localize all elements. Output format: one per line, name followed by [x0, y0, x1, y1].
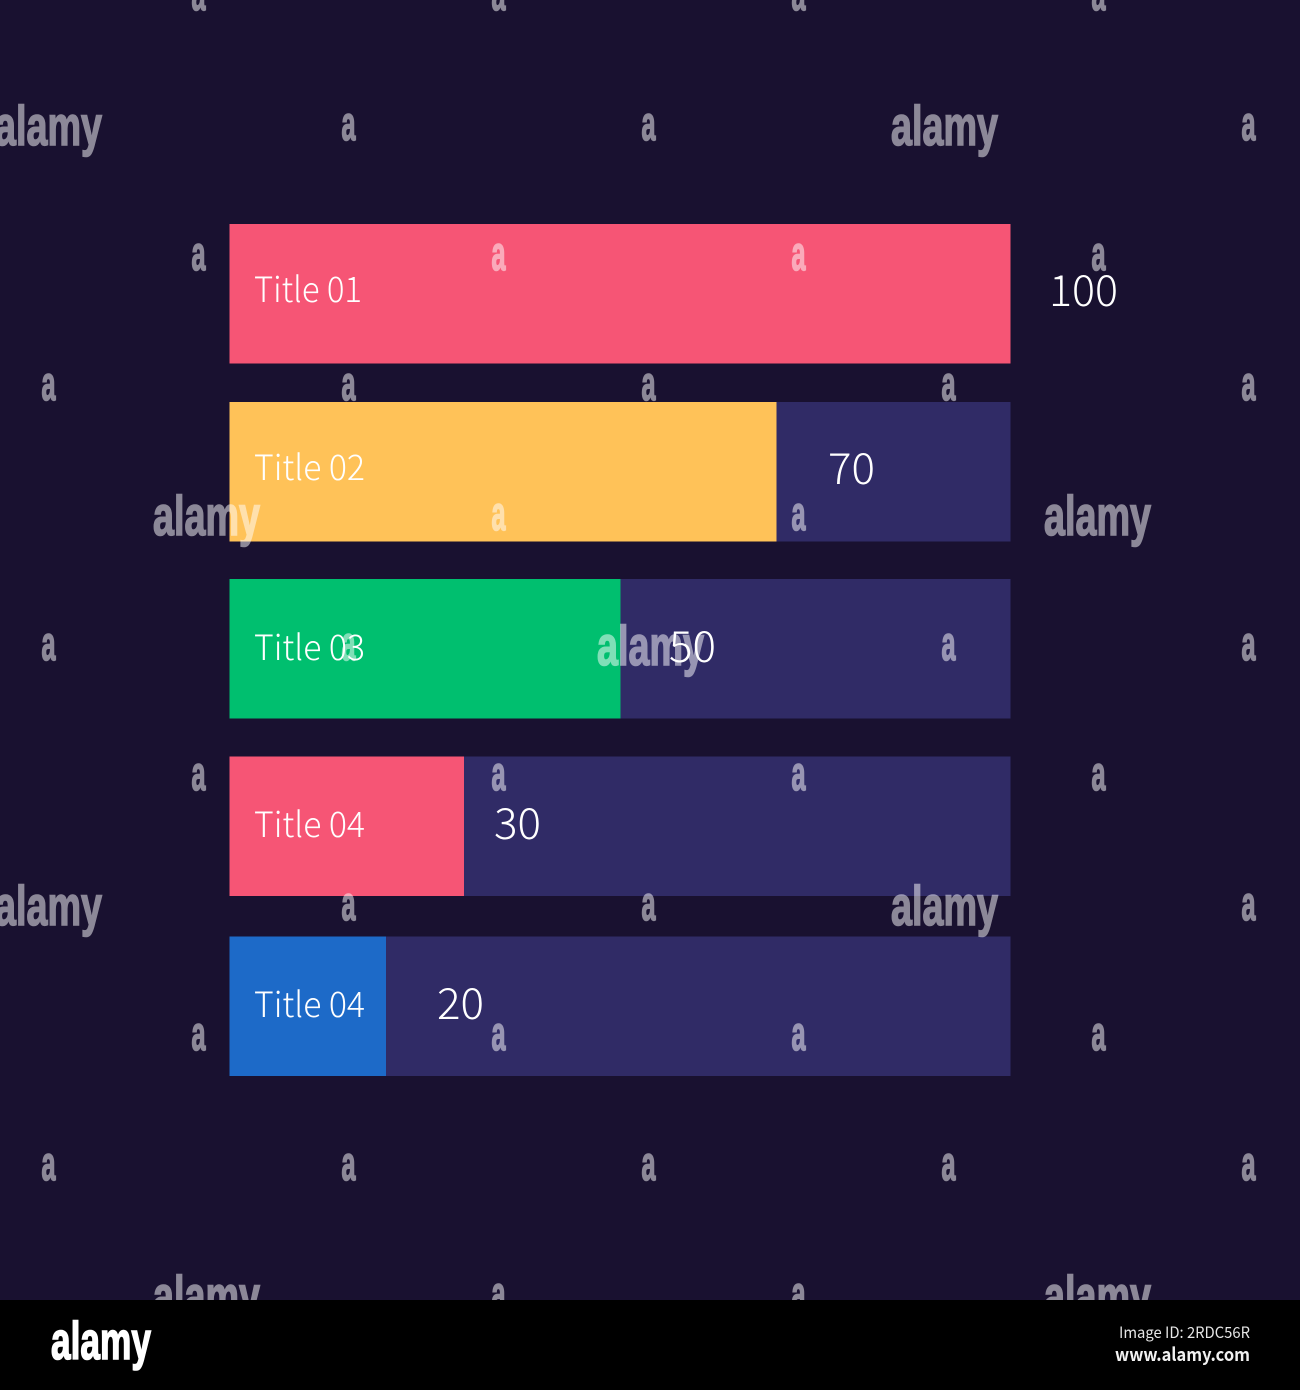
- bar row: Title 02, value 70: 70: [828, 435, 875, 497]
- watermark pattern: a: [1092, 1008, 1106, 1061]
- watermark pattern: a: [1242, 358, 1256, 411]
- watermark pattern: a: [642, 358, 656, 411]
- watermark pattern: a: [942, 618, 956, 671]
- watermark pattern: a: [1242, 1138, 1256, 1191]
- watermark pattern: a: [1242, 878, 1256, 931]
- watermark pattern: a: [42, 1138, 56, 1191]
- watermark pattern: a: [1092, 748, 1106, 801]
- bar row: Title 03, value 50: Title 03: [254, 620, 365, 671]
- watermark pattern: a: [642, 98, 656, 151]
- watermark pattern: a: [792, 488, 806, 541]
- watermark pattern: alamy: [891, 94, 998, 157]
- watermark pattern: a: [792, 228, 806, 281]
- watermark pattern: a: [42, 358, 56, 411]
- bar row: Title 03, value 50: [230, 579, 1010, 718]
- watermark pattern: a: [792, 1008, 806, 1061]
- bar chart: [230, 224, 1118, 1076]
- watermark pattern: a: [492, 488, 506, 541]
- bar row: Title 04, value 20: Title 04: [254, 977, 365, 1028]
- bar row: Title 04, value 20: [230, 936, 1010, 1076]
- watermark pattern: a: [342, 878, 356, 931]
- watermark pattern: a: [192, 1008, 206, 1061]
- bar row: Title 03, value 50: 50: [669, 613, 716, 675]
- image id: Image ID: 2RDC56R: [1119, 1321, 1250, 1343]
- watermark pattern: a: [1242, 98, 1256, 151]
- watermark pattern: a: [792, 748, 806, 801]
- bar row: Title 04, value 20: 20: [437, 970, 484, 1032]
- watermark pattern: a: [342, 98, 356, 151]
- bar row: Title 04, value 30: Title 04: [254, 797, 365, 848]
- watermark pattern: a: [942, 1138, 956, 1191]
- bar row: Title 01, value 100: [230, 224, 1118, 364]
- bar row: Title 01, value 100: Title 01: [254, 262, 362, 313]
- watermark pattern: a: [792, 1268, 806, 1321]
- watermark pattern: a: [1242, 618, 1256, 671]
- watermark pattern: alamy: [891, 874, 998, 937]
- watermark pattern: a: [342, 618, 356, 671]
- watermark pattern: a: [942, 358, 956, 411]
- bar row: Title 02, value 70: Title 02: [254, 440, 365, 491]
- watermark pattern: a: [492, 1008, 506, 1061]
- watermark pattern: a: [642, 878, 656, 931]
- bar row: Title 01, value 100: 100: [1049, 257, 1118, 319]
- footer bar: [0, 1300, 1300, 1390]
- watermark pattern: alamy: [153, 484, 260, 547]
- watermark pattern: alamy: [153, 1264, 260, 1327]
- watermark pattern: a: [342, 358, 356, 411]
- bar row: Title 04, value 30: [230, 756, 1010, 896]
- watermark pattern: a: [1092, 228, 1106, 281]
- watermark pattern: a: [42, 618, 56, 671]
- footer logo: alamy: [51, 1312, 151, 1371]
- watermark pattern: a: [492, 748, 506, 801]
- website url: www.alamy.com: [1115, 1341, 1250, 1367]
- bar row: Title 02, value 70: [230, 402, 1010, 542]
- watermark pattern: alamy: [1044, 484, 1151, 547]
- watermark pattern: a: [192, 228, 206, 281]
- bar row: Title 04, value 30: 30: [494, 790, 541, 852]
- watermark pattern: a: [342, 1138, 356, 1191]
- watermark pattern: alamy: [1044, 1264, 1151, 1327]
- watermark pattern: a: [192, 748, 206, 801]
- watermark pattern: a: [492, 1268, 506, 1321]
- watermark pattern: a: [642, 1138, 656, 1191]
- watermark pattern: alamy: [597, 614, 704, 677]
- watermark pattern: a: [492, 228, 506, 281]
